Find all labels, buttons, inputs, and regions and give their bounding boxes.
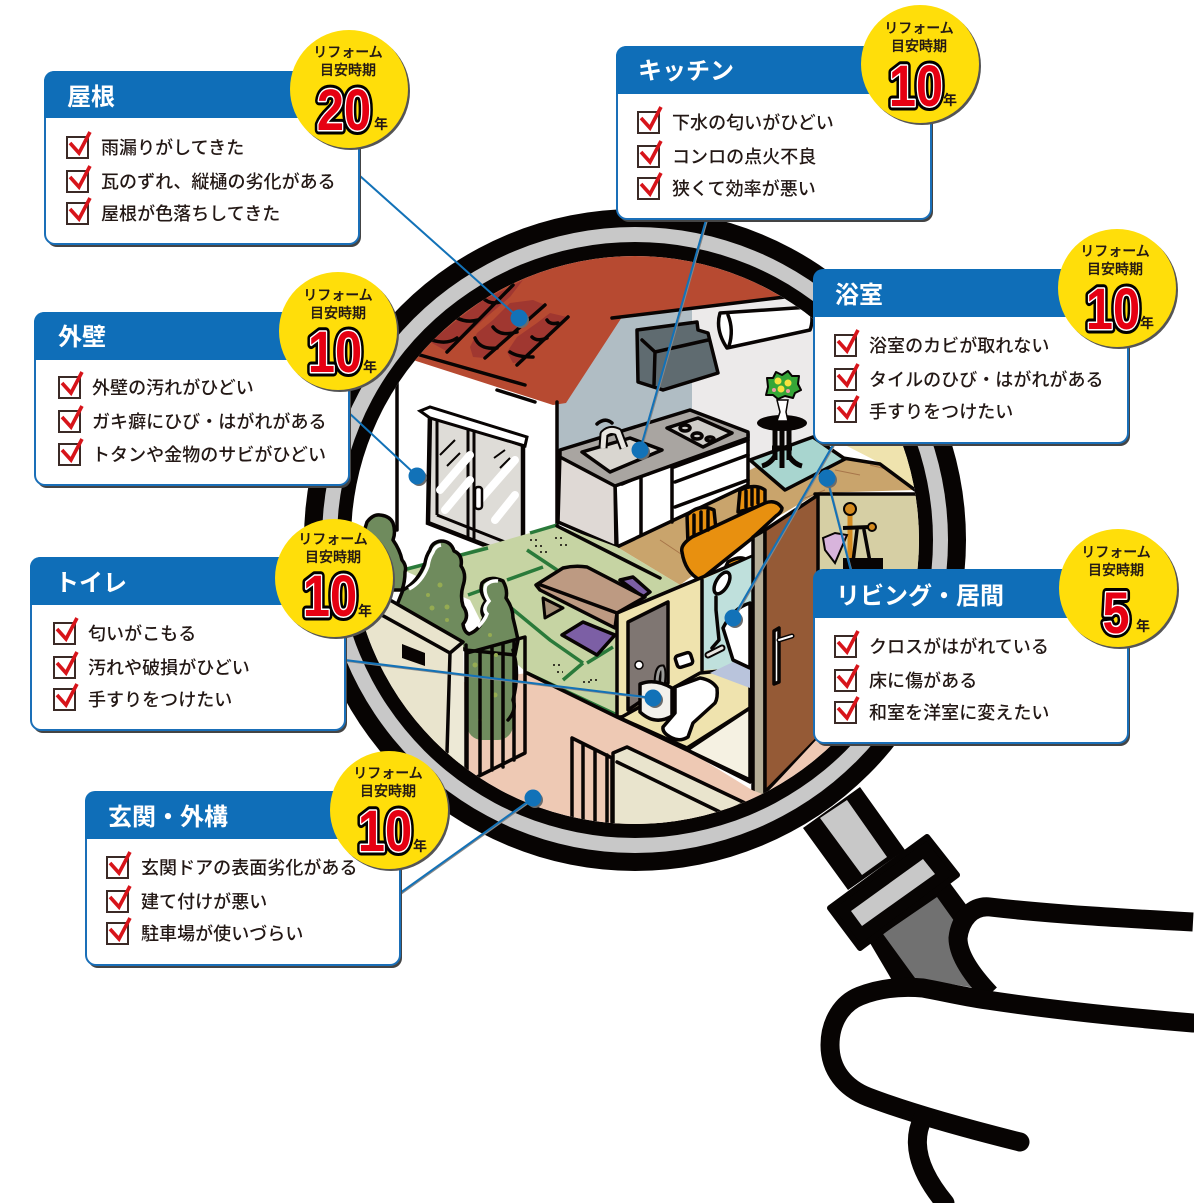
panel: kitchen: リフォーム bbox=[884, 20, 954, 36]
panel: entrance: リフォーム bbox=[353, 765, 423, 781]
panel: kitchen bbox=[616, 5, 981, 222]
panel: living room: 和室を洋室に変えたい bbox=[869, 703, 1049, 723]
panel: bathroom: タイルのひび・はがれがある bbox=[869, 369, 1104, 390]
roof bbox=[415, 256, 785, 405]
panel: bathroom: 浴室のカビが取れない bbox=[869, 335, 1049, 356]
ground bbox=[395, 674, 830, 824]
rug bbox=[750, 437, 845, 490]
left wall bbox=[366, 599, 468, 770]
house illustration bbox=[364, 256, 919, 824]
leader lines and dots bbox=[345, 176, 853, 894]
panel: living room: 年 bbox=[1136, 618, 1150, 634]
panel: bathroom: 手すりをつけたい bbox=[869, 402, 1013, 422]
panel: roof: 年 bbox=[374, 116, 388, 132]
panel: living room: 床に傷がある bbox=[869, 670, 977, 691]
panel: outer wall: 10 bbox=[308, 321, 362, 385]
panel: bathroom: 目安時期 bbox=[1087, 261, 1143, 277]
wall: right room bbox=[692, 286, 813, 470]
low wall and fence bbox=[570, 736, 746, 824]
hand: lower finger and thumb bbox=[830, 987, 1193, 1203]
panel: entrance bbox=[85, 751, 450, 968]
panel: entrance: 年 bbox=[413, 838, 427, 854]
range hood bbox=[637, 322, 718, 390]
panel: toilet: 年 bbox=[358, 603, 372, 619]
magnifier ring bbox=[304, 209, 966, 871]
door bbox=[753, 495, 818, 797]
panel: toilet: 10 bbox=[303, 565, 357, 629]
panel: toilet: 手すりをつけたい bbox=[88, 690, 232, 710]
panel: outer wall: トタンや金物のサビがひどい bbox=[92, 444, 326, 465]
panel: entrance: 建て付けが悪い bbox=[141, 891, 267, 912]
panel: living room: リフォーム bbox=[1081, 544, 1151, 560]
panel: toilet bbox=[30, 519, 395, 733]
panel: roof bbox=[44, 30, 410, 247]
panel: kitchen: 目安時期 bbox=[891, 38, 947, 54]
kitchen counter bbox=[558, 410, 748, 547]
gate bbox=[467, 637, 525, 777]
panel: living room bbox=[813, 529, 1179, 746]
panel: living room: 5 bbox=[1102, 582, 1130, 646]
panel: kitchen: 下水の匂いがひどい bbox=[672, 112, 834, 133]
panel: kitchen: コンロの点火不良 bbox=[672, 147, 816, 167]
wall: kitchen bbox=[558, 310, 692, 449]
heading: 浴室 bbox=[835, 282, 883, 309]
trees bbox=[350, 515, 518, 740]
heading: リビング・居間 bbox=[836, 582, 1004, 610]
panel: living room: 5 bbox=[1102, 582, 1130, 646]
panel: outer wall: リフォーム bbox=[303, 287, 373, 303]
panel: roof: 目安時期 bbox=[320, 62, 376, 78]
panel: outer wall: ガキ癖にひび・はがれがある bbox=[92, 411, 327, 432]
heading: 屋根 bbox=[67, 84, 115, 111]
front wall lines bbox=[397, 380, 557, 530]
heading: キッチン bbox=[638, 58, 734, 85]
panel: toilet: 汚れや破損がひどい bbox=[88, 657, 250, 678]
panel: kitchen: 狭くて効率が悪い bbox=[672, 178, 816, 199]
panel: bathroom: リフォーム bbox=[1080, 243, 1150, 259]
panel: living room: 目安時期 bbox=[1088, 562, 1144, 578]
panel: outer wall bbox=[34, 272, 399, 488]
panel: bathroom: 10 bbox=[1086, 278, 1140, 342]
panel: entrance: 目安時期 bbox=[360, 783, 416, 799]
panel: roof: 雨漏りがしてきた bbox=[101, 137, 244, 158]
panel: roof: 20 bbox=[317, 79, 371, 143]
panel: entrance: 駐車場が使いづらい bbox=[141, 923, 303, 944]
tatami room bbox=[403, 525, 680, 717]
panel: entrance: 10 bbox=[358, 800, 412, 864]
panel: entrance: 10 bbox=[358, 800, 412, 864]
low table and cushions bbox=[536, 566, 650, 655]
panel: outer wall: 年 bbox=[363, 359, 377, 375]
panel: outer wall: 10 bbox=[308, 321, 362, 385]
panel: roof: リフォーム bbox=[313, 44, 383, 60]
hand: upper finger bbox=[958, 907, 1193, 1023]
heading: 外壁 bbox=[58, 324, 106, 351]
panel: toilet: リフォーム bbox=[298, 531, 368, 547]
panel: roof: 瓦のずれ、縦樋の劣化がある bbox=[101, 171, 336, 192]
panel: roof: 20 bbox=[317, 79, 371, 143]
dining table and chairs bbox=[682, 486, 782, 580]
magnifier handle bbox=[803, 787, 990, 988]
bathroom bbox=[617, 556, 753, 780]
heading: トイレ bbox=[55, 570, 127, 597]
panel: living room: クロスがはがれている bbox=[869, 636, 1049, 657]
panel: outer wall: 外壁の汚れがひどい bbox=[92, 377, 254, 398]
panel: toilet: 匂いがこもる bbox=[88, 623, 196, 644]
side table with flower bbox=[757, 371, 807, 468]
panel: roof: 屋根が色落ちしてきた bbox=[101, 203, 280, 224]
panel: toilet: 目安時期 bbox=[305, 549, 361, 565]
window bbox=[420, 407, 527, 560]
panel: bathroom bbox=[813, 229, 1178, 446]
panel: bathroom: 10 bbox=[1086, 278, 1140, 342]
wood floor bbox=[619, 460, 914, 585]
panel: entrance: 玄関ドアの表面劣化がある bbox=[141, 857, 357, 878]
air conditioner bbox=[719, 307, 812, 348]
panel: kitchen: 10 bbox=[889, 55, 943, 119]
panel: toilet: 10 bbox=[303, 565, 357, 629]
heading: 玄関・外構 bbox=[108, 804, 228, 831]
back room bbox=[813, 492, 919, 570]
panel: outer wall: 目安時期 bbox=[310, 305, 366, 321]
panel: kitchen: 年 bbox=[943, 92, 957, 108]
panel: kitchen: 10 bbox=[889, 55, 943, 119]
panel: bathroom: 年 bbox=[1140, 315, 1154, 331]
